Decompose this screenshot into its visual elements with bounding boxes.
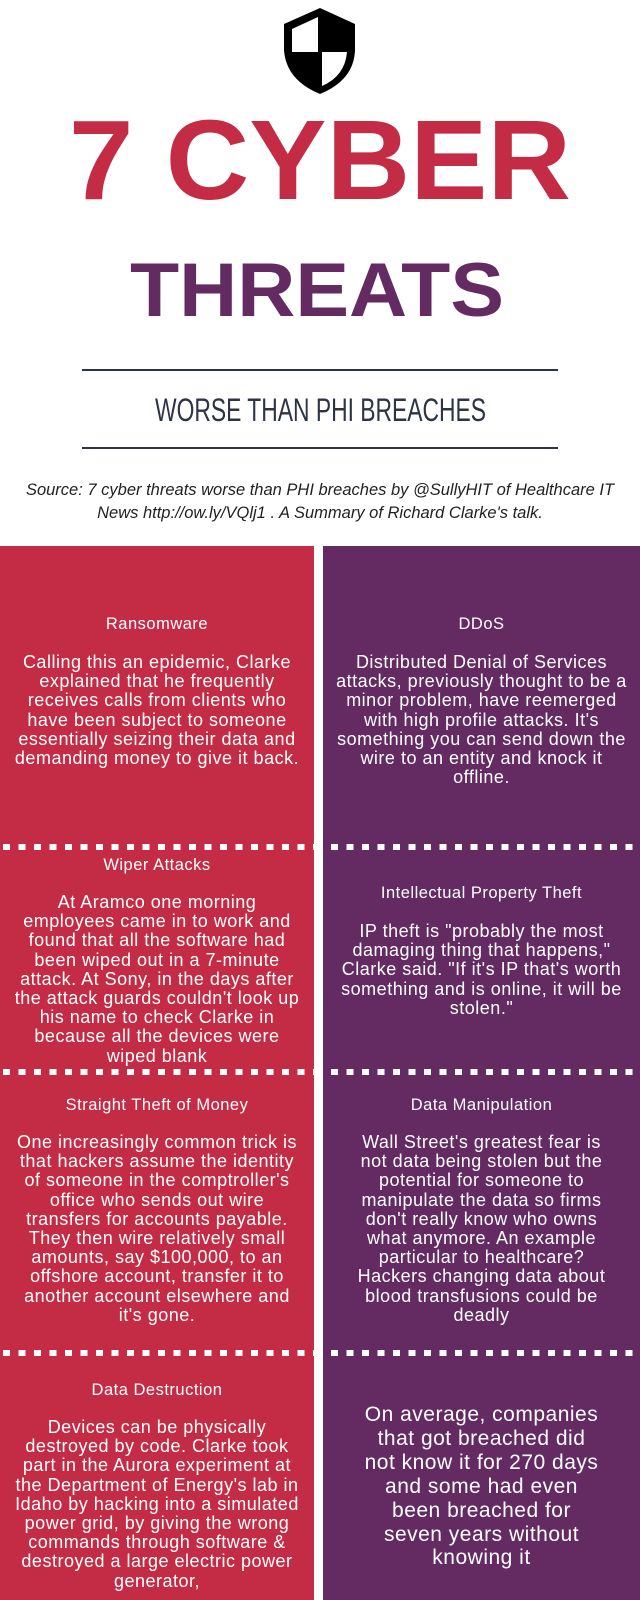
text: theft of money: office who sends out wire bbox=[50, 1190, 264, 1210]
text: ip theft: IP theft is "probably the most bbox=[359, 921, 604, 941]
heading: Ransomware: Ransomware bbox=[106, 615, 208, 633]
heading: Data Manipulation: Data Manipulation bbox=[411, 1096, 552, 1114]
text: data destruction: Devices can be physically bbox=[48, 1417, 266, 1437]
text: ddos bbox=[336, 652, 627, 787]
text: data manipulation: don't really know who owns bbox=[366, 1209, 597, 1229]
text: ddos: attacks, previously thought to be a bbox=[336, 671, 627, 691]
text: ransomware: receives calls from clients who bbox=[28, 690, 286, 710]
text: theft of money: One increasingly common trick is bbox=[17, 1132, 297, 1152]
text: data destruction: part in the Aurora experiment at bbox=[23, 1455, 291, 1475]
icon: shield bbox=[284, 8, 355, 94]
text: data destruction bbox=[15, 1417, 299, 1591]
callout: breach statistic: knowing it bbox=[432, 1546, 531, 1569]
text: data destruction: power grid, by giving the wrong bbox=[25, 1513, 289, 1533]
text: wiper: his name to check Clarke in bbox=[40, 1007, 274, 1027]
text: ransomware: essentially seizing their data and bbox=[18, 729, 296, 749]
text: ip theft bbox=[341, 921, 622, 1018]
callout: breach statistic: been breached for bbox=[392, 1499, 571, 1522]
text: data manipulation: manipulate the data so firms bbox=[361, 1190, 602, 1210]
text: ransomware: explained that he frequently bbox=[39, 671, 275, 691]
text: wiper: attack. At Sony, in the days after bbox=[20, 969, 294, 989]
text: wiper: At Aramco one morning bbox=[58, 892, 256, 912]
text: theft of money: of someone in the comptroller's bbox=[24, 1170, 290, 1190]
panel: right column bbox=[323, 546, 640, 1600]
text: data manipulation: Hackers changing data about bbox=[358, 1266, 605, 1286]
text: data destruction: destroyed by code. Clarke took bbox=[25, 1436, 289, 1456]
text: ddos: offline. bbox=[453, 767, 510, 787]
text: theft of money: another account elsewhere and bbox=[24, 1286, 290, 1306]
text: ip theft: Clarke said. "If it's IP that's worth bbox=[342, 959, 621, 979]
panel: left column bbox=[0, 546, 314, 1600]
text: ip theft: stolen." bbox=[450, 998, 513, 1018]
text: theft of money: offshore account, transfer it to bbox=[30, 1266, 284, 1286]
source text: Source: 7 cyber threats worse than PHI breaches by @SullyHIT of Healthcare IT bbox=[26, 481, 614, 499]
title: THREATS bbox=[130, 248, 504, 333]
heading: IP theft: Intellectual Property Theft bbox=[381, 884, 582, 902]
text: data manipulation: what anymore. An example bbox=[367, 1228, 596, 1248]
callout: breach statistic: seven years without bbox=[384, 1523, 579, 1546]
callout: breach statistic: and some had even bbox=[385, 1475, 578, 1498]
text: data manipulation: deadly bbox=[453, 1305, 510, 1325]
text: data manipulation: particular to healthcare? bbox=[379, 1247, 584, 1267]
text: ddos: something you can send down the bbox=[337, 729, 626, 749]
subtitle: WORSE THAN PHI BREACHES bbox=[155, 392, 486, 428]
text: wiper bbox=[15, 892, 299, 1066]
text: theft of money: They then wire relatively small bbox=[29, 1228, 285, 1248]
text: wiper: been wiped out in a 7-minute bbox=[34, 950, 280, 970]
callout: breach statistic bbox=[365, 1403, 598, 1569]
source text bbox=[26, 481, 615, 522]
callout: breach statistic: that got breached did bbox=[378, 1427, 585, 1450]
title: 7 CYBER bbox=[69, 100, 571, 223]
text: theft of money: amounts, say $100,000, to an bbox=[31, 1247, 283, 1267]
text: wiper: employees came in to work and bbox=[23, 911, 291, 931]
text: theft of money bbox=[17, 1132, 297, 1325]
text: theft of money: it's gone. bbox=[119, 1305, 195, 1325]
text: theft of money: that hackers assume the identity bbox=[20, 1151, 294, 1171]
text: data manipulation: Wall Street's greatest fear is bbox=[362, 1132, 601, 1152]
text: ransomware bbox=[15, 652, 299, 768]
text: ddos: minor problem, have reemerged bbox=[346, 690, 617, 710]
text: data destruction: generator, bbox=[114, 1571, 200, 1591]
text: theft of money: transfers for accounts payable. bbox=[26, 1209, 288, 1229]
text: ddos: Distributed Denial of Services bbox=[356, 652, 607, 672]
heading: Wiper Attacks: Wiper Attacks bbox=[103, 856, 211, 874]
text: wiper: the attack guards couldn't look up bbox=[15, 988, 299, 1008]
heading: DDoS: DDoS bbox=[458, 615, 504, 633]
text: data manipulation bbox=[358, 1132, 605, 1325]
text: ransomware: have been subject to someone bbox=[27, 710, 287, 730]
text: ip theft: damaging thing that happens," bbox=[352, 940, 611, 960]
text: data manipulation: not data being stolen but the bbox=[361, 1151, 602, 1171]
source text: News http://ow.ly/VQlj1 . A Summary of Richard Clarke's talk. bbox=[97, 504, 543, 522]
callout: breach statistic: not know it for 270 days bbox=[365, 1451, 598, 1474]
heading: Data Destruction: Data Destruction bbox=[92, 1381, 222, 1399]
text: ip theft: something and is online, it will be bbox=[341, 979, 622, 999]
heading: Straight Theft of Money: Straight Theft of Money bbox=[66, 1096, 248, 1114]
text: wiper: wiped blank bbox=[107, 1046, 207, 1066]
text: data manipulation: blood transfusions could be bbox=[365, 1286, 598, 1306]
text: wiper: because all the devices were bbox=[34, 1026, 280, 1046]
text: data destruction: commands through software & bbox=[28, 1532, 286, 1552]
text: data destruction: destroyed a large electric power bbox=[21, 1551, 293, 1571]
text: ransomware: Calling this an epidemic, Clarke bbox=[23, 652, 291, 672]
text: ransomware: demanding money to give it back. bbox=[15, 748, 299, 768]
callout: breach statistic: On average, companies bbox=[365, 1403, 598, 1426]
text: wiper: found that all the software had bbox=[29, 930, 285, 950]
text: ddos: wire to an entity and knock it bbox=[360, 748, 603, 768]
text: data destruction: Idaho by hacking into a simulated bbox=[15, 1494, 299, 1514]
text: data destruction: the Department of Energy's lab in bbox=[15, 1475, 299, 1495]
title bbox=[69, 100, 571, 333]
text: data manipulation: potential for someone to bbox=[379, 1170, 584, 1190]
text: ddos: with high profile attacks. It's bbox=[364, 710, 599, 730]
